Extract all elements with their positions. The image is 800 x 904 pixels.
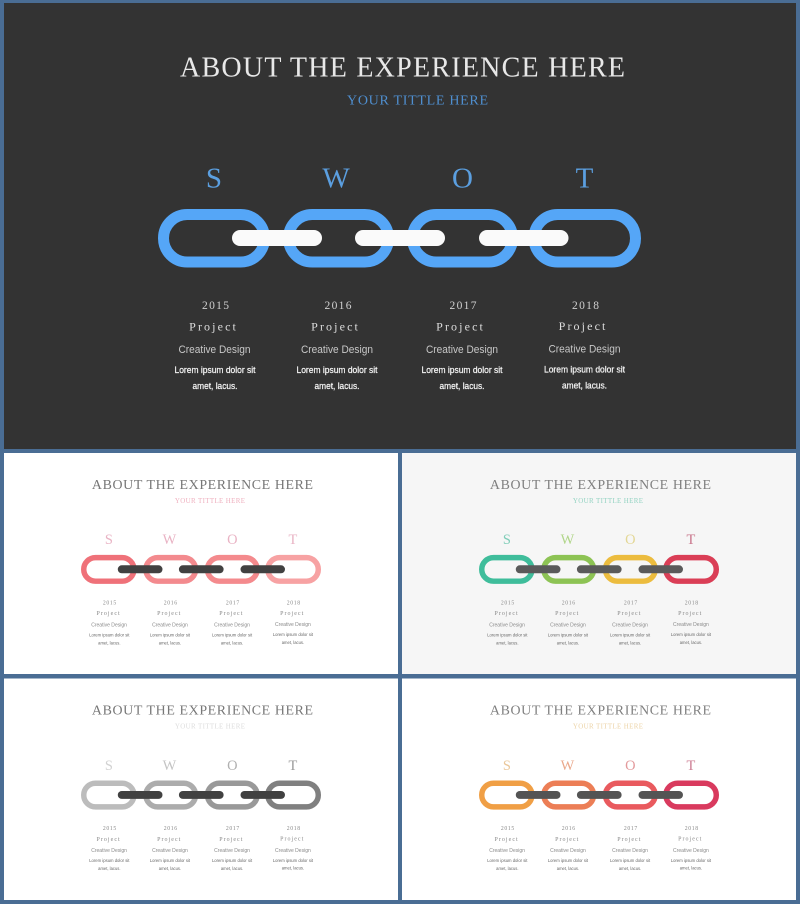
column text: Creative Design <box>275 848 311 854</box>
SWOT letters: S <box>503 532 511 548</box>
column text: Creative Design <box>152 848 188 854</box>
column text: 2017 <box>624 601 637 607</box>
column text: amet, lacus. <box>496 640 519 646</box>
column text: 2017 <box>226 601 239 607</box>
column text: Creative Design <box>214 848 250 854</box>
connector bars <box>118 791 285 799</box>
column: 2018: 2018 <box>572 300 599 312</box>
column text: Project <box>494 611 518 617</box>
column text: Lorem ipsum dolor sit <box>610 632 651 638</box>
column: 2016: Lorem ipsum dolor sit <box>296 365 378 376</box>
column: 2015: 2015 <box>202 300 229 312</box>
column text: Creative Design <box>489 622 525 628</box>
column text: amet, lacus. <box>557 866 579 872</box>
column text: 2018 <box>685 826 698 832</box>
column text: amet, lacus. <box>619 640 641 646</box>
column text: 2015 <box>103 601 116 607</box>
column: 2016: Project <box>311 320 359 334</box>
SWOT letters: O <box>625 532 636 548</box>
column text: Lorem ipsum dolor sit <box>273 858 314 864</box>
title: ABOUT THE EXPERIENCE HERE <box>92 704 313 719</box>
chain links <box>84 558 318 581</box>
SWOT letters <box>105 532 298 548</box>
column text: Lorem ipsum dolor sit <box>212 858 253 864</box>
column text: 2016 <box>164 601 177 607</box>
column text: Project <box>555 611 579 617</box>
column text: Lorem ipsum dolor sit <box>150 858 191 864</box>
column: 2015: Project <box>189 320 237 334</box>
SWOT letters: W <box>163 758 177 774</box>
column text <box>487 826 712 872</box>
SWOT letters: T <box>289 758 298 774</box>
column text: Project <box>219 611 243 617</box>
column text: amet, lacus. <box>557 640 579 646</box>
column: 2016 <box>296 300 378 392</box>
title: ABOUT THE EXPERIENCE HERE <box>490 478 711 493</box>
column text: 2018 <box>287 826 300 832</box>
column text: Creative Design <box>612 622 648 628</box>
column text: amet, lacus. <box>496 866 519 872</box>
column: 2018: Project <box>559 319 606 333</box>
subtitle: YOUR TITTLE HERE <box>175 497 245 505</box>
column text: Project <box>96 837 120 843</box>
subtitle: YOUR TITTLE HERE <box>573 723 643 731</box>
column text: Creative Design <box>673 848 709 854</box>
column text: amet, lacus. <box>282 866 304 872</box>
panel: grey theme slide <box>4 678 398 900</box>
column text: Creative Design <box>489 848 525 854</box>
column text: Creative Design <box>91 848 127 854</box>
column text: 2018 <box>685 601 698 607</box>
column text: amet, lacus. <box>619 866 641 872</box>
column text: 2015 <box>501 601 514 607</box>
column: 2018: Lorem ipsum dolor sit <box>544 364 625 376</box>
column: 2017: Creative Design <box>426 344 498 356</box>
SWOT letters: S <box>105 532 113 548</box>
connector bars <box>516 791 683 799</box>
connector bars <box>516 565 683 573</box>
SWOT letters <box>503 532 696 548</box>
column text: 2018 <box>287 601 300 607</box>
column text: Creative Design <box>214 622 250 628</box>
column text: Creative Design <box>673 622 709 628</box>
column text: Project <box>96 611 120 617</box>
column text: Lorem ipsum dolor sit <box>212 632 253 638</box>
column: 2017 <box>422 300 503 392</box>
chain links <box>482 783 716 807</box>
column text: 2016 <box>562 601 575 607</box>
chain links <box>164 214 636 262</box>
title: ABOUT THE EXPERIENCE HERE <box>92 478 313 493</box>
column text: amet, lacus. <box>680 866 702 872</box>
SWOT letters: T <box>576 162 594 194</box>
column text: amet, lacus. <box>159 866 181 872</box>
SWOT letters: S <box>206 162 222 194</box>
column: 2015: Creative Design <box>178 344 250 356</box>
column text: amet, lacus. <box>98 640 121 646</box>
column text: Lorem ipsum dolor sit <box>89 632 130 638</box>
SWOT letters <box>503 758 696 774</box>
column: 2015 <box>174 300 256 392</box>
connector bars <box>118 565 285 573</box>
column text: amet, lacus. <box>680 640 702 646</box>
column: 2016: amet, lacus. <box>314 381 360 392</box>
chain links <box>84 783 318 807</box>
column text: Project <box>280 837 304 843</box>
SWOT letters <box>206 162 594 194</box>
column text: Project <box>280 611 304 617</box>
column text: Lorem ipsum dolor sit <box>487 858 528 864</box>
column: 2015: amet, lacus. <box>192 381 238 392</box>
SWOT letters: T <box>289 532 298 548</box>
column text: amet, lacus. <box>221 866 243 872</box>
panel: multicolor theme slide <box>402 453 796 674</box>
column: 2016: 2016 <box>324 300 352 312</box>
column text: Lorem ipsum dolor sit <box>671 858 712 864</box>
column text: Project <box>157 837 181 843</box>
SWOT letters: W <box>561 758 575 774</box>
column text: Project <box>494 837 518 843</box>
SWOT letters: W <box>322 162 350 194</box>
column text <box>89 826 314 872</box>
panel: orange theme slide <box>402 678 796 900</box>
column text: Project <box>555 837 579 843</box>
SWOT letters: S <box>503 758 511 774</box>
column text: Creative Design <box>91 622 127 628</box>
column: 2017: amet, lacus. <box>440 381 484 392</box>
column text: Lorem ipsum dolor sit <box>671 632 712 638</box>
panel: pink theme slide <box>4 453 398 674</box>
column text: 2017 <box>624 826 637 832</box>
column text: Project <box>219 837 243 843</box>
column text: Lorem ipsum dolor sit <box>548 858 589 864</box>
column text: amet, lacus. <box>98 866 121 872</box>
column text: 2016 <box>164 826 177 832</box>
column: 2017: Lorem ipsum dolor sit <box>422 365 503 376</box>
column text: Creative Design <box>550 848 586 854</box>
title: ABOUT THE EXPERIENCE HERE <box>490 704 711 719</box>
column: 2017: 2017 <box>450 300 477 312</box>
column text: Project <box>617 837 641 843</box>
column text: Lorem ipsum dolor sit <box>610 858 651 864</box>
subtitle: YOUR TITTLE HERE <box>175 723 245 731</box>
column text: amet, lacus. <box>221 640 243 646</box>
SWOT letters: O <box>625 758 636 774</box>
SWOT letters: S <box>105 758 113 774</box>
column text: 2015 <box>103 826 116 832</box>
column text: Project <box>678 837 702 843</box>
SWOT letters: O <box>452 162 473 194</box>
column: 2018: amet, lacus. <box>562 380 607 392</box>
column: 2017: Project <box>436 320 484 334</box>
chain links <box>482 558 716 581</box>
column text <box>487 601 712 646</box>
column text: Creative Design <box>550 622 586 628</box>
column text: Lorem ipsum dolor sit <box>89 858 130 864</box>
column text: 2017 <box>226 826 239 832</box>
column text: Lorem ipsum dolor sit <box>548 632 589 638</box>
SWOT letters <box>105 758 298 774</box>
connector bars <box>232 230 568 246</box>
panel: dark main slide <box>4 3 796 449</box>
column: 2018 <box>544 300 625 392</box>
subtitle: YOUR TITTLE HERE <box>573 497 643 505</box>
column: 2015: Lorem ipsum dolor sit <box>174 365 256 376</box>
SWOT letters: W <box>163 532 177 548</box>
column text: Project <box>157 611 181 617</box>
column text: Lorem ipsum dolor sit <box>487 632 528 638</box>
column text: Project <box>617 611 641 617</box>
SWOT letters: O <box>227 758 238 774</box>
subtitle: YOUR TITTLE HERE <box>347 94 488 108</box>
SWOT letters: W <box>561 532 575 548</box>
column text <box>89 601 314 646</box>
column text: Lorem ipsum dolor sit <box>150 632 191 638</box>
column text: 2016 <box>562 826 575 832</box>
column: 2016: Creative Design <box>301 344 373 356</box>
column text: 2015 <box>501 826 514 832</box>
column text: amet, lacus. <box>159 640 181 646</box>
SWOT letters: O <box>227 532 238 548</box>
column: 2018: Creative Design <box>548 344 620 356</box>
title: ABOUT THE EXPERIENCE HERE <box>180 52 625 84</box>
column text: Creative Design <box>275 622 311 628</box>
column text: Project <box>678 611 702 617</box>
SWOT letters: T <box>687 758 696 774</box>
column text: Creative Design <box>612 848 648 854</box>
column text: Creative Design <box>152 622 188 628</box>
column text: amet, lacus. <box>282 640 304 646</box>
SWOT letters: T <box>687 532 696 548</box>
column text: Lorem ipsum dolor sit <box>273 632 314 638</box>
